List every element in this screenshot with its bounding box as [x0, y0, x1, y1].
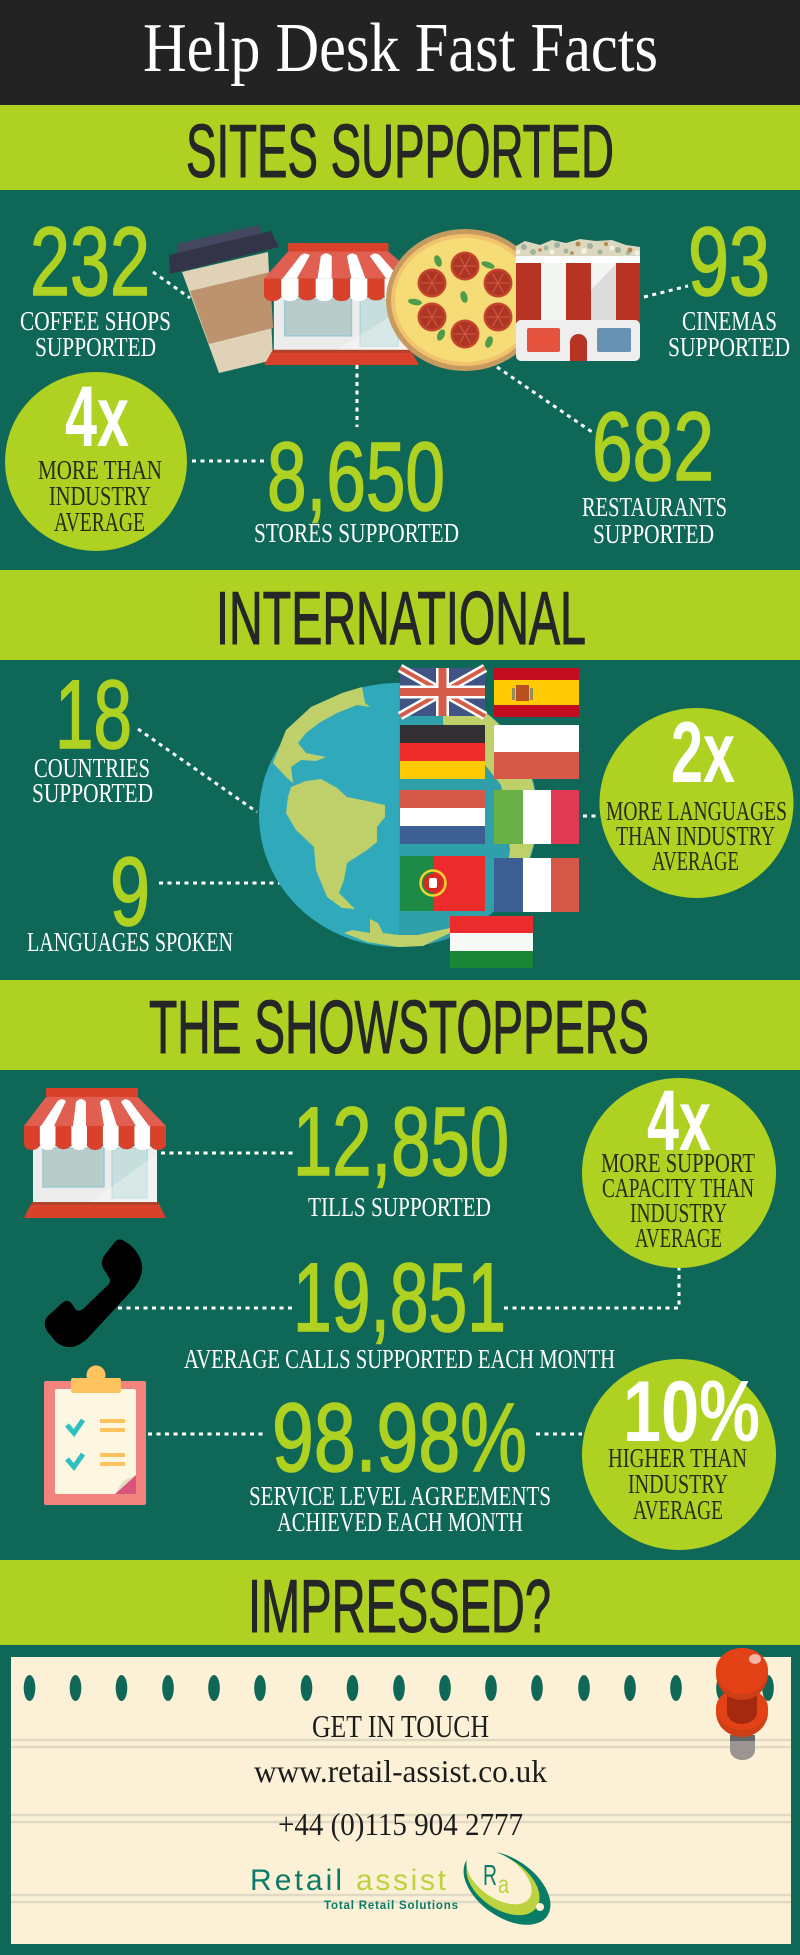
connector: cinemas: [644, 286, 688, 297]
stat: calls: AVERAGE CALLS SUPPORTED EACH MONTH: [184, 1343, 615, 1374]
logo: Retail Assist: a: [498, 1871, 509, 1899]
icon: flag Poland: [494, 725, 579, 779]
panel: contact card: [11, 1648, 791, 1944]
callout: 10% higher: [582, 1359, 776, 1550]
stat: coffee shops: [20, 207, 171, 362]
callout: 4x more than industry average: 4x: [65, 369, 129, 465]
stat: calls: [184, 1243, 615, 1374]
title banner: [0, 0, 800, 105]
stat: stores: [254, 422, 459, 548]
stat: service levels: [249, 1383, 551, 1537]
connector: restaurants: [497, 367, 592, 432]
stat: countries: SUPPORTED: [32, 777, 153, 808]
stat: restaurants: SUPPORTED: [593, 518, 714, 549]
stat: coffee shops: 232: [30, 207, 150, 316]
heading: international: INTERNATIONAL: [216, 576, 586, 660]
stat: tills: [293, 1087, 509, 1222]
icon: flag Germany: [400, 725, 485, 779]
icon: coffee cup: [169, 225, 279, 373]
icon: globe: [259, 683, 538, 947]
stat: languages: LANGUAGES SPOKEN: [27, 926, 233, 957]
connector: phone to calls: [118, 1306, 294, 1310]
icon: pizza: [386, 229, 544, 371]
callout: 4x support capacity: AVERAGE: [635, 1222, 722, 1253]
logo: Retail Assist: R: [483, 1860, 497, 1892]
icon: cinema popcorn box: [516, 239, 640, 361]
stat: service levels: ACHIEVED EACH MONTH: [277, 1506, 523, 1537]
stat: restaurants: 682: [592, 392, 714, 501]
contact details: www.retail-assist.co.uk: [254, 1753, 547, 1789]
icon: flag Portugal: [400, 856, 485, 911]
callout: 10% higher: INDUSTRY: [628, 1468, 728, 1499]
callout: 10% higher: HIGHER THAN: [608, 1442, 747, 1473]
icon: push pin: [716, 1648, 768, 1760]
connector: stores: [356, 365, 358, 427]
stat: stores: 8,650: [267, 422, 445, 531]
stat: cinemas: 93: [688, 207, 770, 316]
logo: Retail Assist: Retail: [250, 1864, 342, 1897]
connector: SLA to callout: [536, 1432, 582, 1436]
icon: clipboard checklist: [44, 1366, 146, 1505]
callout: 4x more than industry average: [5, 369, 187, 551]
icon: telephone handset: [45, 1239, 142, 1347]
panel: international: [0, 660, 800, 980]
callout: 4x support capacity: 4x: [647, 1073, 711, 1169]
stat: coffee shops: SUPPORTED: [35, 331, 156, 362]
stat: coffee shops: COFFEE SHOPS: [20, 305, 171, 336]
stat: countries: 18: [55, 660, 132, 769]
stat: stores: STORES SUPPORTED: [254, 517, 459, 548]
callout: 2x more languages: [600, 705, 794, 898]
heading: international: [0, 570, 800, 660]
stat: restaurants: RESTAURANTS: [582, 491, 727, 522]
stat: service levels: SERVICE LEVEL AGREEMENTS: [249, 1480, 551, 1511]
panel: sites supported: [0, 190, 800, 570]
contact details: [254, 1708, 547, 1842]
logo: Retail Assist: assist: [356, 1864, 447, 1897]
callout: 4x more than industry average: MORE THAN: [38, 454, 162, 485]
callout: 10% higher: 10%: [623, 1364, 760, 1460]
callout: 4x more than industry average: INDUSTRY: [49, 480, 151, 511]
stat: service levels: 98.98%: [272, 1383, 527, 1492]
connector: countries to globe: [138, 729, 257, 812]
connector: store to tills: [161, 1152, 296, 1154]
connector: flags to callout: [583, 814, 598, 818]
connector: industry average to stores: [192, 460, 267, 462]
callout: 2x more languages: AVERAGE: [652, 845, 739, 876]
stat: tills: TILLS SUPPORTED: [308, 1191, 491, 1222]
stat: countries: [32, 660, 153, 808]
stat: tills: 12,850: [293, 1087, 509, 1196]
callout: 4x support capacity: [582, 1073, 776, 1268]
notepad holes: [24, 1675, 774, 1701]
callout: 2x more languages: 2x: [671, 705, 735, 801]
icon: flag UK: [400, 668, 485, 716]
contact details: GET IN TOUCH: [312, 1708, 489, 1744]
icon: flag Spain: [494, 668, 579, 717]
connector: coffee shops: [153, 272, 190, 298]
icon: flag Hungary: [450, 916, 533, 968]
title banner: Help Desk Fast Facts: [143, 10, 658, 87]
contact details: +44 (0)115 904 2777: [278, 1806, 523, 1842]
heading: impressed: [0, 1560, 800, 1648]
callout: 4x more than industry average: AVERAGE: [54, 506, 145, 537]
icon: flag Italy: [494, 790, 579, 844]
stat: restaurants: [582, 392, 727, 549]
callout: 4x support capacity: INDUSTRY: [630, 1197, 727, 1228]
panel: the showstoppers: [0, 1070, 800, 1560]
stat: calls: 19,851: [293, 1243, 506, 1352]
connector: clipboard to SLA: [148, 1432, 264, 1436]
connector: languages to globe: [159, 882, 281, 884]
icon: storefront: [264, 243, 419, 365]
connector: calls to callout: [504, 1268, 679, 1308]
heading: impressed: IMPRESSED?: [248, 1564, 551, 1648]
stat: languages: [27, 837, 233, 957]
logo: Retail Assist: Total Retail Solutions: [324, 1900, 458, 1912]
stat: countries: COUNTRIES: [34, 752, 150, 783]
icon: flag France: [494, 858, 579, 912]
stat: cinemas: [668, 207, 790, 362]
icon: storefront: [24, 1088, 166, 1218]
callout: 10% higher: AVERAGE: [633, 1494, 723, 1525]
logo: Retail Assist: [250, 1836, 564, 1940]
icon: flag Netherlands: [400, 790, 485, 844]
stat: languages: 9: [110, 837, 150, 946]
